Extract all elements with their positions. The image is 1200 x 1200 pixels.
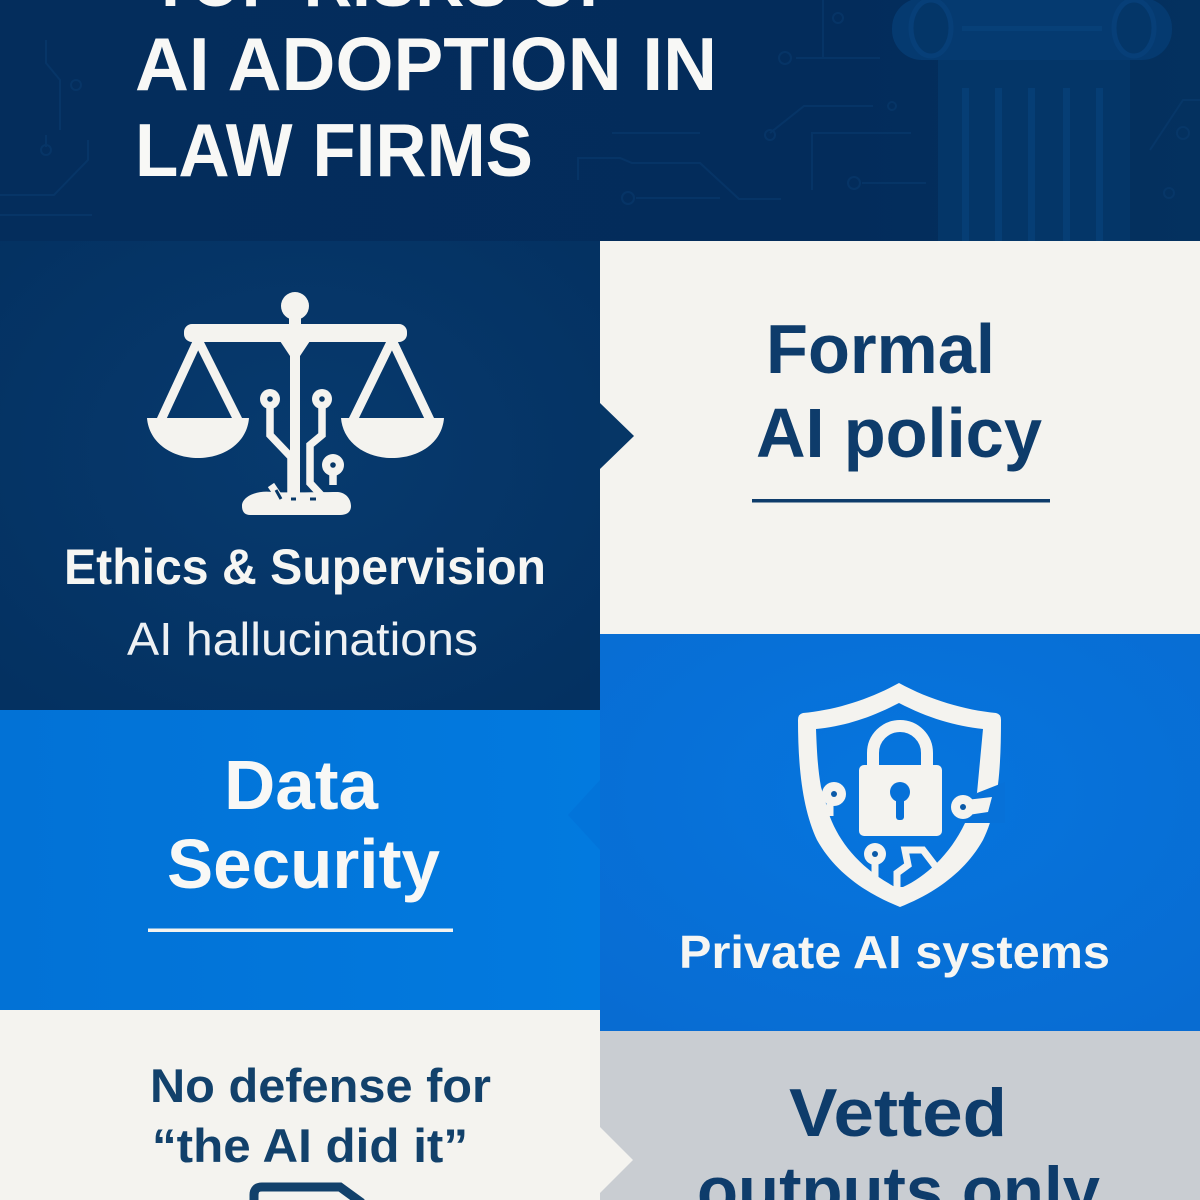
panel: ethics and supervision xyxy=(0,241,634,710)
icon: shield with lock xyxy=(798,683,1005,907)
heading: vetted outputs only xyxy=(697,1075,1100,1200)
heading: private AI systems: Private AI systems xyxy=(679,926,1110,978)
title: AI ADOPTION IN xyxy=(135,22,717,106)
icon: scales with circuit xyxy=(147,292,444,515)
heading: formal AI policy: Formal xyxy=(766,310,995,388)
text: no defense xyxy=(150,1059,491,1172)
text: no defense: No defense for xyxy=(150,1059,491,1112)
heading: formal AI policy: AI policy xyxy=(756,394,1042,472)
heading: data security: Data xyxy=(224,746,379,824)
title: LAW FIRMS xyxy=(135,108,533,192)
heading: ethics and supervision: Ethics & Supervision xyxy=(64,539,546,595)
icon: document xyxy=(254,1187,362,1200)
heading: vetted outputs only: Vetted xyxy=(789,1075,1007,1151)
heading: formal AI policy xyxy=(756,310,1042,472)
panel: header xyxy=(0,0,1200,241)
arrow: navy pointer xyxy=(600,403,634,469)
arrow: cream pointer xyxy=(600,1127,633,1193)
text: no defense: “the AI did it” xyxy=(152,1119,468,1172)
decorative circuit traces xyxy=(0,0,1200,215)
panel: data security xyxy=(0,710,600,1010)
panel: private AI systems xyxy=(600,634,1200,1031)
panel: vetted outputs only xyxy=(600,1031,1200,1200)
subheading: AI hallucinations: AI hallucinations xyxy=(127,613,478,665)
heading: data security: Security xyxy=(167,825,440,903)
title xyxy=(135,0,717,192)
panel: no defense xyxy=(0,1010,633,1200)
icon: classical column xyxy=(892,0,1172,241)
underline xyxy=(752,499,1050,502)
heading: data security xyxy=(167,746,440,903)
panel: formal AI policy xyxy=(600,241,1200,634)
underline xyxy=(148,928,453,932)
arrow: blue pointer xyxy=(568,780,600,850)
